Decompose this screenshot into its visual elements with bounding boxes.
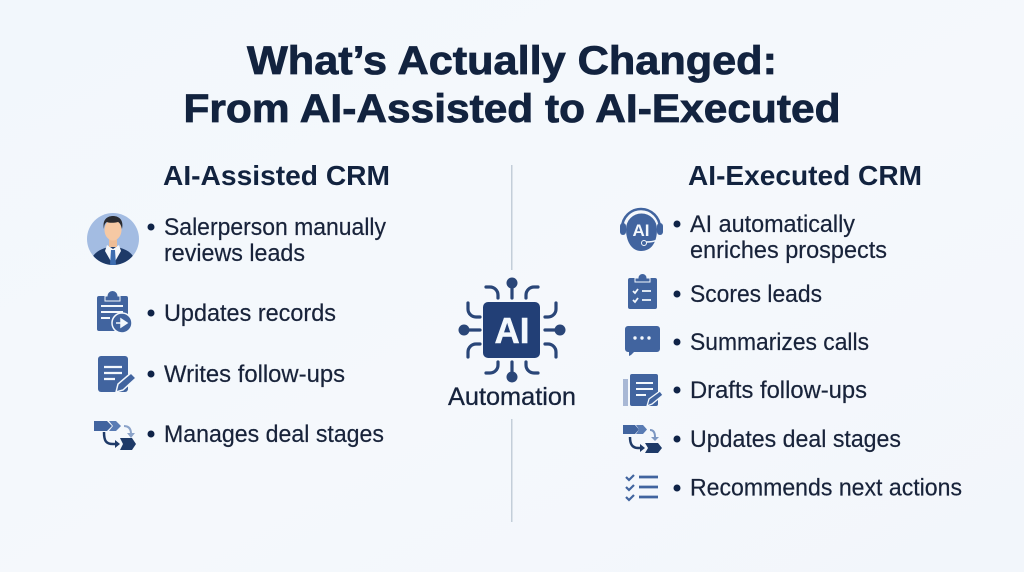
label: Automation: Automation (448, 383, 576, 411)
icon: scoring clipboard (628, 274, 657, 309)
title: From AI-Assisted to AI-Executed (184, 87, 840, 131)
bullet: writes follow-ups: Writes follow-ups (164, 361, 345, 388)
icon: AI chip: AI (494, 310, 530, 351)
bullet: scores leads: Scores leads (690, 281, 822, 308)
heading: AI-Assisted CRM: AI-Assisted CRM (163, 160, 390, 191)
divider top (511, 165, 512, 270)
title: What’s Actually Changed: (247, 39, 777, 83)
bullet: recommends next actions: Recommends next actions (690, 474, 962, 502)
icon: AI chip (458, 278, 566, 382)
panel: AI-Executed CRM (620, 160, 962, 502)
icon: document with pen (98, 356, 136, 392)
bullet: drafts follow-ups: Drafts follow-ups (690, 377, 867, 404)
divider bottom (511, 419, 512, 522)
icon: checklist (626, 475, 658, 500)
bullet: updates records: Updates records (164, 300, 336, 327)
bullet: enriches prospects: enriches prospects (690, 237, 887, 264)
icon: clipboard with arrow (97, 290, 132, 333)
bullet: reviews leads: reviews leads (164, 240, 305, 267)
bullet: updates deal stages: Updates deal stages (690, 426, 901, 453)
bullet: enriches prospects (674, 211, 887, 264)
icon: drafts document (623, 374, 663, 406)
icon: AI headset: AI (632, 221, 650, 240)
panel: AI-Assisted CRM (87, 160, 390, 450)
icon: salesperson avatar (87, 213, 139, 266)
title (184, 39, 840, 131)
icon: deal stage flow (94, 421, 136, 450)
icon: chat bubble (625, 326, 660, 356)
bullet: reviews leads: Salerperson manually (164, 214, 386, 241)
icon: AI headset (620, 209, 663, 251)
bullet: summarizes calls: Summarizes calls (690, 329, 869, 356)
bullet: manages deal stages: Manages deal stages (164, 421, 384, 448)
heading: AI-Executed CRM: AI-Executed CRM (688, 160, 922, 191)
icon: update deal stages flow (623, 425, 662, 453)
bullet: enriches prospects: AI automatically (690, 211, 855, 238)
bullet: reviews leads (148, 214, 386, 267)
